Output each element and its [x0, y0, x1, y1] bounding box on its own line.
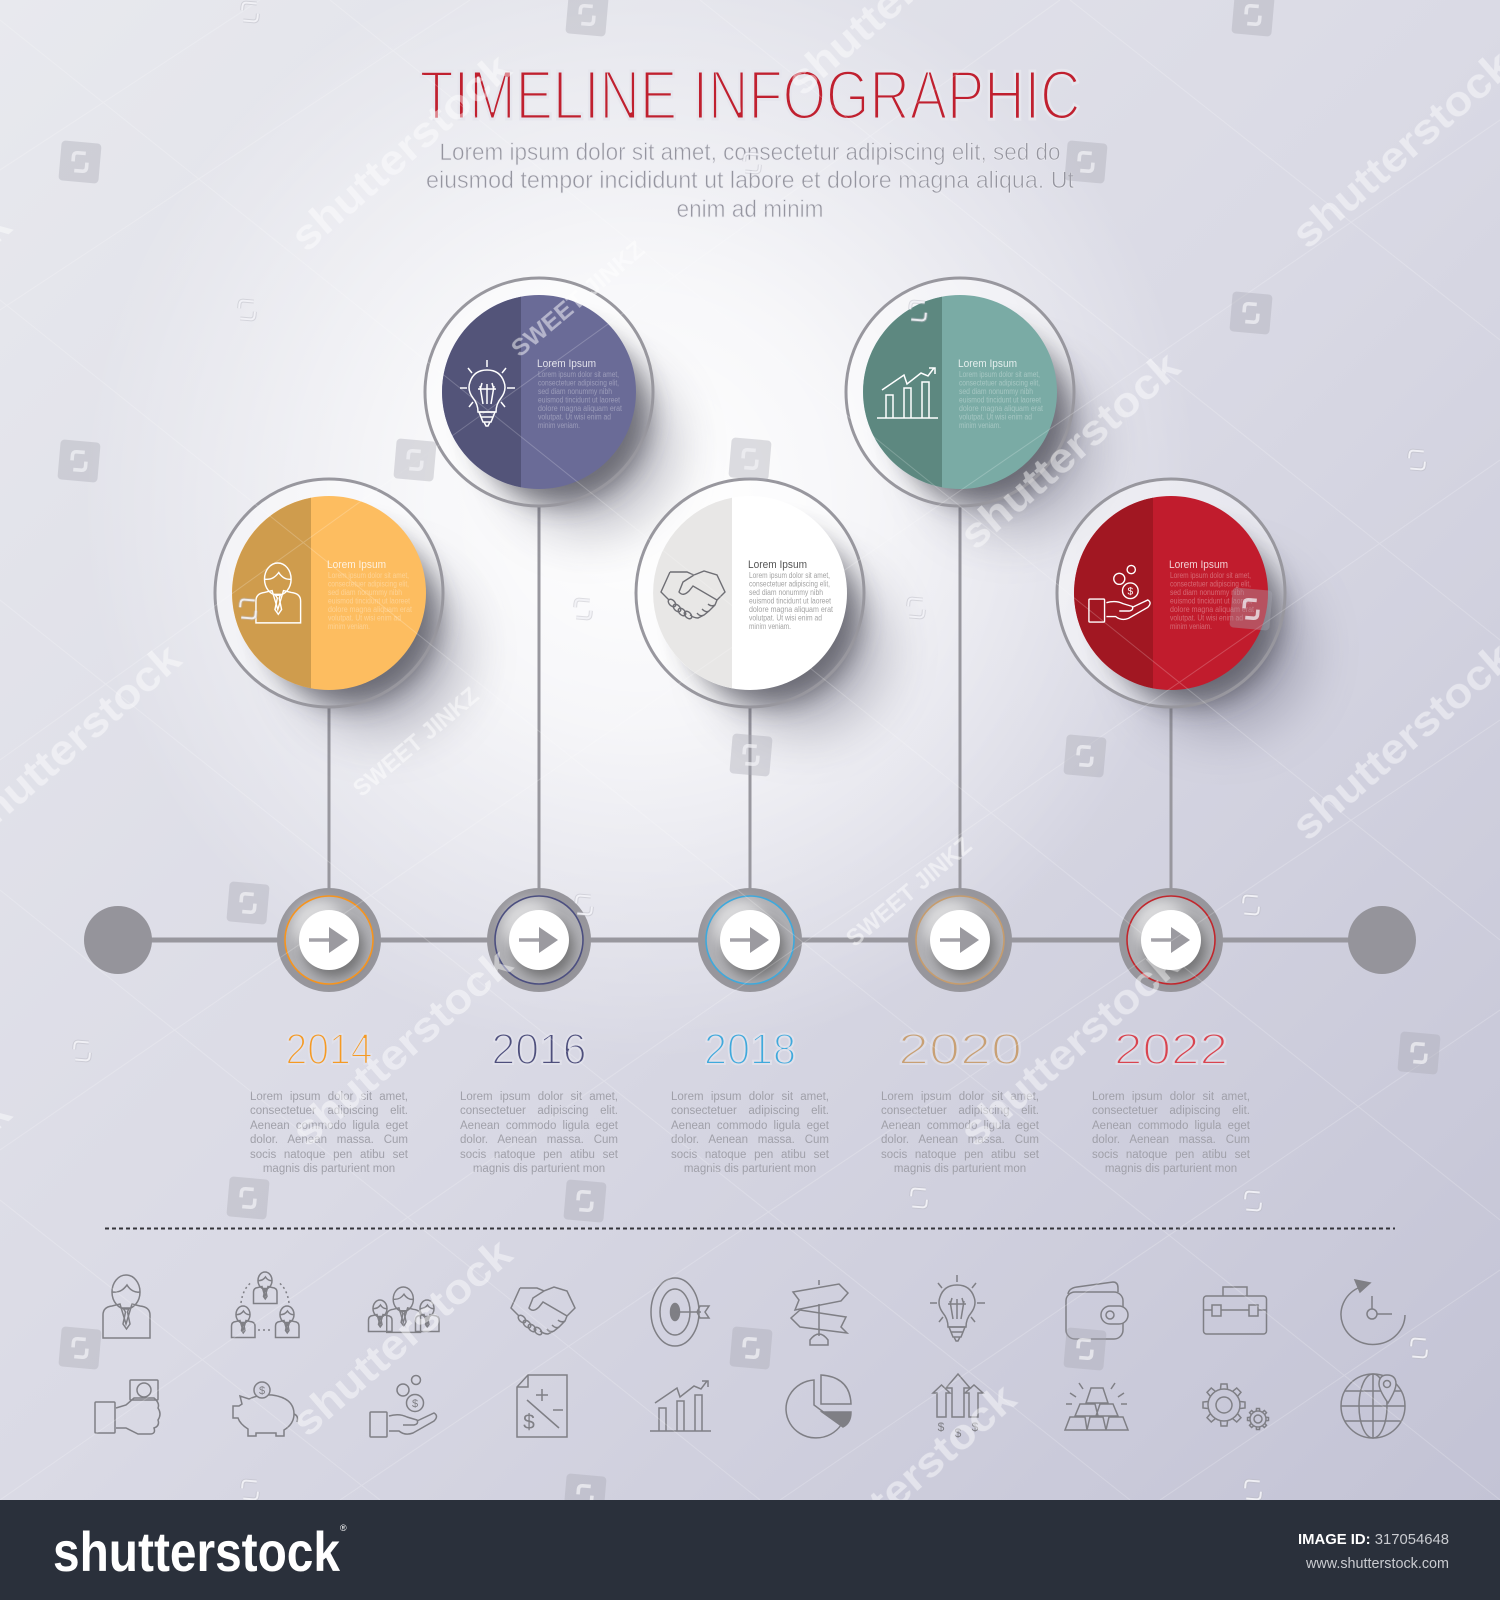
disc text: euismod tincidunt ut laoreet — [749, 596, 832, 606]
panel: 2014 disc — [215, 479, 465, 733]
text block 2016 — [460, 1090, 618, 1180]
disc text: euismod tincidunt ut laoreet — [959, 396, 1042, 404]
text block 2022 — [1092, 1090, 1250, 1180]
icon: light bulb — [460, 360, 515, 426]
text block 2020: socis natoque pen atibu set — [881, 1149, 1039, 1161]
panel: 2020 disc — [846, 278, 1096, 532]
subtitle text block: Lorem ipsum dolor sit amet, consectetur adipiscing elit, sed do — [440, 139, 1060, 166]
watermark layer: SWEET JINKZ — [841, 832, 977, 952]
icon: financial document — [517, 1375, 567, 1437]
watermark layer: shutterstock — [282, 1229, 521, 1445]
disc text: volutpat. Ut wisi enim ad — [959, 412, 1032, 421]
timeline node 2022 — [1119, 888, 1223, 992]
timeline axis — [118, 938, 1382, 942]
icon: clock arrow — [1341, 1280, 1405, 1344]
left end dot — [84, 906, 152, 974]
icon: gears — [1203, 1384, 1268, 1430]
watermark layer: shutterstock — [1282, 633, 1500, 849]
disc text: Lorem Ipsum — [537, 358, 596, 370]
year 2022: 2022 — [1114, 1025, 1228, 1074]
footer logo: shutterstock — [53, 1520, 341, 1583]
icon: pie chart — [786, 1375, 851, 1438]
icon: gold bars — [1065, 1383, 1128, 1430]
icon: piggy bank — [233, 1382, 298, 1436]
disc text: dolore magna aliquam erat — [959, 404, 1044, 413]
text block 2018: Lorem ipsum dolor sit amet, — [671, 1091, 829, 1103]
icon set — [95, 1272, 1405, 1440]
disc text: Lorem ipsum dolor sit amet, — [538, 370, 619, 379]
disc text: Lorem ipsum dolor sit amet, — [749, 571, 830, 580]
text block 2022: Lorem ipsum dolor sit amet, — [1092, 1091, 1250, 1103]
watermark layer: shutterstock — [281, 44, 520, 260]
watermark layer: shutterstock — [786, 1374, 1025, 1590]
text block 2020: consectetuer adipiscing elit. — [881, 1105, 1039, 1117]
text block 2018: dolor. Aenean massa. Cum — [671, 1134, 829, 1146]
disc text — [327, 559, 413, 631]
text block 2014: dolor. Aenean massa. Cum — [250, 1134, 408, 1146]
watermark layer: shutterstock — [282, 939, 521, 1155]
icon: growth chart — [877, 368, 938, 418]
website: www.shutterstock.com — [1305, 1555, 1449, 1572]
watermark layer: shutterstock — [1282, 41, 1500, 257]
icon: person — [103, 1275, 150, 1338]
footer bar — [0, 1500, 1500, 1600]
timeline node 2014 — [277, 888, 381, 992]
disc text: minim veniam. — [1170, 622, 1212, 631]
disc text: Lorem Ipsum — [958, 358, 1017, 370]
panel: 2018 disc — [636, 479, 886, 733]
disc text: dolore magna aliquam erat — [328, 605, 413, 614]
icon: target — [651, 1278, 709, 1346]
disc text: sed diam nonummy nibh — [749, 588, 823, 597]
disc text: consectetuer adipiscing elit, — [959, 378, 1040, 388]
disc text: consectetuer adipiscing elit, — [538, 378, 619, 388]
icon: handshake — [661, 571, 725, 620]
timeline node 2016 — [487, 888, 591, 992]
disc text: Lorem Ipsum — [748, 559, 807, 571]
text block 2022: magnis dis parturient mon — [1105, 1163, 1237, 1175]
disc text: euismod tincidunt ut laoreet — [538, 396, 621, 404]
text block 2018: consectetuer adipiscing elit. — [671, 1105, 829, 1117]
disc text: sed diam nonummy nibh — [328, 588, 402, 597]
text block 2022: consectetuer adipiscing elit. — [1092, 1105, 1250, 1117]
disc text: minim veniam. — [959, 421, 1001, 430]
disc text: Lorem Ipsum — [1169, 559, 1228, 571]
icon: handshake — [511, 1287, 575, 1336]
connectors — [328, 505, 1172, 892]
icon: briefcase — [1203, 1287, 1267, 1334]
icon: coins in hand — [1089, 565, 1150, 622]
disc text: consectetuer adipiscing elit, — [749, 580, 830, 588]
year 2018: 2018 — [704, 1025, 796, 1074]
text block 2022: socis natoque pen atibu set — [1092, 1149, 1250, 1161]
disc text: euismod tincidunt ut laoreet — [1170, 596, 1253, 606]
subtitle text block: enim ad minim — [676, 196, 824, 223]
disc text: consectetuer adipiscing elit, — [328, 580, 409, 588]
icon: financial document: $ — [523, 1411, 535, 1434]
icon: person — [256, 563, 301, 623]
disc text: sed diam nonummy nibh — [959, 387, 1033, 396]
text block 2014 — [250, 1090, 408, 1180]
title: TIMELINE INFOGRAPHIC — [420, 56, 1080, 134]
year 2014: 2014 — [286, 1025, 372, 1074]
text block 2020: dolor. Aenean massa. Cum — [881, 1134, 1039, 1146]
disc text: minim veniam. — [749, 622, 791, 631]
disc text: minim veniam. — [328, 622, 370, 631]
text block 2014: magnis dis parturient mon — [263, 1163, 395, 1175]
text block 2022: Aenean commodo ligula eget — [1092, 1120, 1250, 1132]
icon: signpost — [791, 1280, 848, 1345]
text block 2018: socis natoque pen atibu set — [671, 1149, 829, 1161]
icon: rising arrows — [933, 1374, 983, 1440]
timeline node 2018 — [698, 888, 802, 992]
disc text: sed diam nonummy nibh — [1170, 588, 1244, 597]
icon: coins in hand: $ — [412, 1398, 418, 1410]
disc text: volutpat. Ut wisi enim ad — [749, 613, 822, 622]
icon: light bulb — [930, 1275, 985, 1341]
text block 2020: magnis dis parturient mon — [894, 1163, 1026, 1175]
text block 2016: dolor. Aenean massa. Cum — [460, 1134, 618, 1146]
disc text: euismod tincidunt ut laoreet — [328, 596, 411, 606]
disc text: consectetuer adipiscing elit, — [1170, 580, 1251, 588]
panel: 2016 disc — [425, 278, 675, 532]
text block 2016: Lorem ipsum dolor sit amet, — [460, 1091, 618, 1103]
right end dot — [1348, 906, 1416, 974]
icon: piggy bank: $ — [259, 1385, 265, 1397]
icon: growth chart — [650, 1381, 711, 1431]
disc text: dolore magna aliquam erat — [1170, 605, 1255, 614]
icon: network — [232, 1272, 299, 1338]
icon: hand with money — [95, 1380, 160, 1434]
icon: coins in hand: $ — [1128, 586, 1134, 597]
text block 2018 — [671, 1090, 829, 1180]
disc text: sed diam nonummy nibh — [538, 387, 612, 396]
icon: rising arrows: $ — [955, 1426, 962, 1440]
icon: globe with pin — [1341, 1374, 1405, 1438]
disc text: dolore magna aliquam erat — [749, 605, 834, 614]
icon: wallet — [1066, 1282, 1128, 1339]
text block 2016: magnis dis parturient mon — [473, 1163, 605, 1175]
disc text: dolore magna aliquam erat — [538, 404, 623, 413]
watermark layer: shutterstock — [950, 939, 1189, 1155]
text block 2014: socis natoque pen atibu set — [250, 1149, 408, 1161]
text block 2020 — [881, 1090, 1039, 1180]
disc text: Lorem ipsum dolor sit amet, — [328, 571, 409, 580]
text block 2014: consectetuer adipiscing elit. — [250, 1105, 408, 1117]
watermark layer: SWEET JINKZ — [506, 236, 650, 363]
text block 2016: consectetuer adipiscing elit. — [460, 1105, 618, 1117]
image id: IMAGE ID: 317054648 — [1298, 1531, 1449, 1548]
text block 2016: Aenean commodo ligula eget — [460, 1120, 618, 1132]
disc text: Lorem Ipsum — [327, 559, 386, 571]
text block 2020: Aenean commodo ligula eget — [881, 1120, 1039, 1132]
subtitle text block: eiusmod tempor incididunt ut labore et dolore magna aliqua. Ut — [426, 167, 1074, 194]
icon: rising arrows: $ — [972, 1420, 979, 1434]
timeline node 2020 — [908, 888, 1012, 992]
subtitle text block — [426, 139, 1074, 223]
disc text: volutpat. Ut wisi enim ad — [538, 412, 611, 421]
text block 2014: Lorem ipsum dolor sit amet, — [250, 1091, 408, 1103]
disc text: Lorem ipsum dolor sit amet, — [1170, 571, 1251, 580]
watermark layer: SWEET JINKZ — [348, 682, 484, 802]
text block 2016: socis natoque pen atibu set — [460, 1149, 618, 1161]
panel: 2022 disc — [1057, 479, 1307, 733]
disc text: volutpat. Ut wisi enim ad — [1170, 613, 1243, 622]
registered mark: ® — [340, 1523, 347, 1533]
text block 2018: magnis dis parturient mon — [684, 1163, 816, 1175]
disc text: Lorem ipsum dolor sit amet, — [959, 370, 1040, 379]
disc text — [748, 559, 834, 631]
text block 2022: dolor. Aenean massa. Cum — [1092, 1134, 1250, 1146]
text block 2014: Aenean commodo ligula eget — [250, 1120, 408, 1132]
disc text — [1169, 559, 1255, 631]
watermark layer: shutterstock — [950, 342, 1189, 558]
icon: rising arrows: $ — [938, 1420, 945, 1434]
text block 2020: Lorem ipsum dolor sit amet, — [881, 1091, 1039, 1103]
disc text: volutpat. Ut wisi enim ad — [328, 613, 401, 622]
year 2020: 2020 — [898, 1025, 1022, 1074]
disc text — [537, 358, 623, 430]
icon: coins in hand — [370, 1376, 436, 1437]
year 2016: 2016 — [492, 1025, 586, 1074]
disc text: minim veniam. — [538, 421, 580, 430]
text block 2018: Aenean commodo ligula eget — [671, 1120, 829, 1132]
icon: team — [368, 1287, 439, 1332]
disc text — [958, 358, 1044, 430]
